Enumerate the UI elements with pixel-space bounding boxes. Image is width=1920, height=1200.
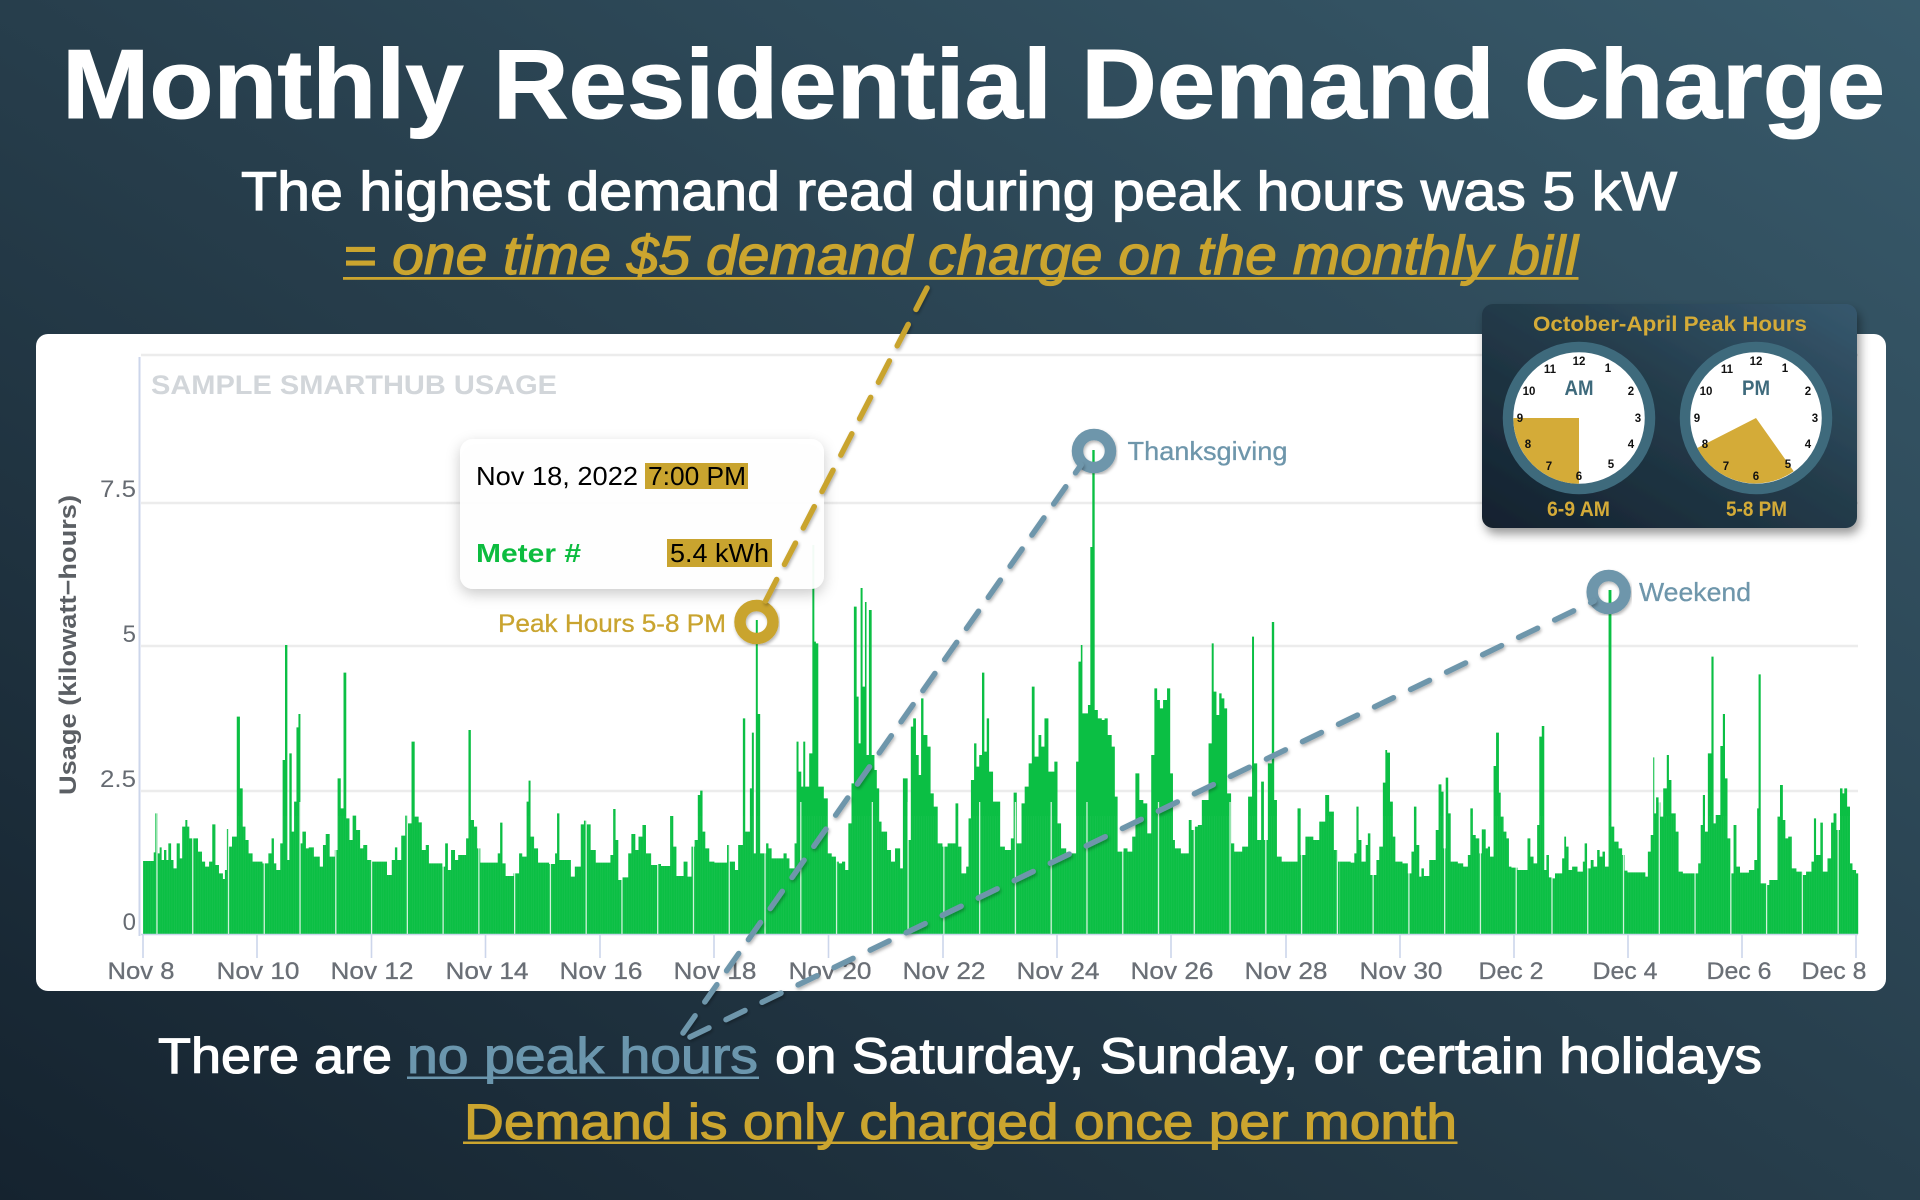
x axis labels: Nov 12: [330, 958, 414, 985]
x axis labels: Nov 22: [902, 958, 986, 985]
x axis labels: Dec 8: [1802, 958, 1866, 985]
clock: AM: 9: [1517, 413, 1523, 425]
x axis labels: Nov 28: [1244, 958, 1328, 985]
clock: AM: 11: [1544, 364, 1557, 376]
AM hours caption: 6-9 AM: [1547, 498, 1610, 521]
marker: thanksgiving ring: [1078, 434, 1110, 468]
y axis title: Usage (kilowatt−hours): [55, 495, 82, 795]
label: weekend: Weekend: [1639, 577, 1751, 607]
x axis labels: Nov 18: [674, 958, 756, 985]
x axis labels: Nov 30: [1360, 958, 1442, 985]
clock: AM: 12: [1573, 356, 1585, 368]
footer: no peak hours statement: [158, 1028, 1762, 1084]
clock: PM: [1685, 347, 1827, 489]
clock: AM: 8: [1525, 439, 1532, 451]
x axis labels: Nov 20: [788, 958, 872, 985]
clock: AM: 1: [1605, 363, 1612, 375]
y axis labels: 2.5: [100, 766, 136, 793]
clock: AM: [1508, 347, 1650, 489]
tooltip meter label: Meter #: [476, 538, 582, 568]
subtitle: one time charge: = one time $5 demand charge on the monthly bill: [343, 224, 1580, 286]
tooltip time highlight: 7:00 PM: [648, 461, 746, 491]
clock: PM: 8: [1702, 439, 1709, 451]
clocks heading: October-April Peak Hours: [1533, 313, 1807, 336]
marker: weekend ring: [1592, 576, 1625, 608]
x axis labels: Nov 16: [560, 958, 642, 985]
x axis labels: Dec 2: [1478, 958, 1544, 985]
chart heading: SAMPLE SMARTHUB USAGE: [151, 370, 557, 400]
y axis labels: 5: [123, 621, 136, 648]
clock: AM: 2: [1628, 386, 1634, 398]
x axis labels: Nov 10: [216, 958, 300, 985]
arrow: thanksgiving dashed connector: [683, 465, 1081, 1033]
x axis labels: [108, 958, 1866, 985]
x axis labels: Nov 8: [108, 958, 174, 985]
panel: usage chart: [36, 334, 1886, 991]
clock: AM: 10: [1523, 386, 1535, 398]
clock: AM: 5: [1608, 459, 1615, 471]
arrow: weekend dashed connector: [690, 601, 1594, 1037]
clock: PM: PM: [1742, 377, 1770, 400]
bar chart: hourly usage: [143, 450, 1858, 934]
panel: peak hours clocks: [1482, 304, 1857, 528]
label: peak hours: Peak Hours 5-8 PM: [498, 610, 726, 638]
PM hours caption: 5-8 PM: [1726, 498, 1787, 521]
clock: PM: 2: [1805, 386, 1811, 398]
subtitle: highest demand: The highest demand read during peak hours was 5 kW: [241, 160, 1677, 222]
clock: AM: 6: [1576, 471, 1582, 483]
tooltip date: Nov 18, 2022: [476, 461, 638, 491]
y axis labels: 0: [123, 909, 136, 936]
clock: PM: 3: [1812, 413, 1818, 425]
clock: PM: 7: [1723, 461, 1729, 473]
clock: PM: 9: [1694, 413, 1700, 425]
x axis line and ticks: [141, 934, 1858, 958]
x axis labels: Nov 14: [446, 958, 528, 985]
clock: PM: 6: [1753, 471, 1759, 483]
title: Monthly Residential Demand Charge: [62, 29, 1885, 139]
tooltip: [460, 439, 824, 589]
footer: no peak hours statement: on Saturday, Sunday, or certain holidays: [775, 1028, 1762, 1084]
x axis labels: Dec 4: [1592, 958, 1658, 985]
footer: no peak hours statement: There are: [158, 1028, 392, 1084]
arrow: gold dashed connector: [762, 288, 927, 608]
footer: no peak hours statement: no peak hours: [407, 1028, 758, 1084]
clock: PM: 4: [1805, 439, 1812, 451]
x axis labels: Nov 24: [1016, 958, 1100, 985]
clock: AM: 3: [1635, 413, 1641, 425]
clock: PM: 5: [1785, 459, 1792, 471]
y axis labels: 7.5: [100, 476, 136, 503]
clock: PM: 10: [1700, 386, 1712, 398]
clock: AM: AM: [1564, 377, 1594, 400]
y axis and grid: [140, 355, 1858, 936]
clock: PM: 12: [1750, 356, 1762, 368]
clock: PM: 1: [1782, 363, 1789, 375]
footer: charged once per month: Demand is only charged once per month: [464, 1094, 1457, 1150]
y axis labels: [100, 476, 136, 936]
clock: PM: 11: [1721, 364, 1734, 376]
label: thanksgiving: Thanksgiving: [1128, 436, 1288, 466]
x axis labels: Dec 6: [1706, 958, 1772, 985]
clock: AM: 7: [1546, 461, 1552, 473]
clock: AM: 4: [1628, 439, 1635, 451]
x axis labels: Nov 26: [1130, 958, 1214, 985]
marker: peak ring: [740, 606, 773, 638]
tooltip value highlight: 5.4 kWh: [670, 538, 769, 568]
